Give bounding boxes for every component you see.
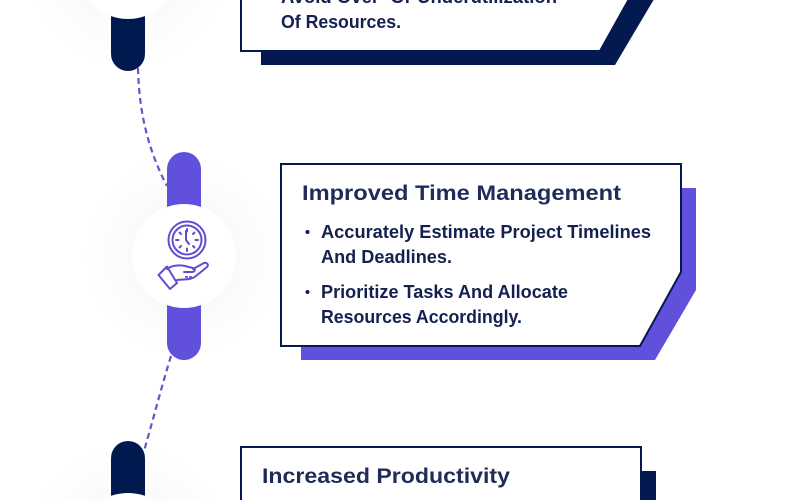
node: middle timeline marker <box>84 152 284 360</box>
icon: clock over open hand <box>158 222 208 289</box>
heading: improved time management: Improved Time Management <box>302 181 621 205</box>
list: time management bullets: And Deadlines. <box>321 247 452 267</box>
card body <box>241 0 628 51</box>
connector: bottom dashed line <box>144 356 171 451</box>
list: time management bullets: Accurately Estimate Project Timelines <box>321 222 651 242</box>
connector: top dashed line <box>138 68 167 186</box>
card shadow: navy <box>261 471 656 500</box>
list: time management bullets: Resources Accordingly. <box>321 307 522 327</box>
card shadow: navy <box>261 0 654 65</box>
card body <box>281 164 681 346</box>
list: time management bullets <box>306 222 651 327</box>
card: increased productivity <box>241 447 656 500</box>
text: top card bullet lines <box>281 0 557 32</box>
list: time management bullets: Prioritize Tasks And Allocate <box>321 282 568 302</box>
card outline <box>241 447 641 500</box>
card body <box>241 447 641 500</box>
heading: increased productivity: Increased Productivity <box>262 464 510 488</box>
card: improved time management <box>281 164 696 360</box>
node: top timeline marker <box>28 0 228 71</box>
card: top resource card <box>241 0 654 65</box>
text: top card bullet lines: Of Resources. <box>281 12 401 32</box>
card outline <box>241 0 628 51</box>
node: bottom timeline marker <box>28 441 228 500</box>
card shadow: purple <box>301 188 696 360</box>
